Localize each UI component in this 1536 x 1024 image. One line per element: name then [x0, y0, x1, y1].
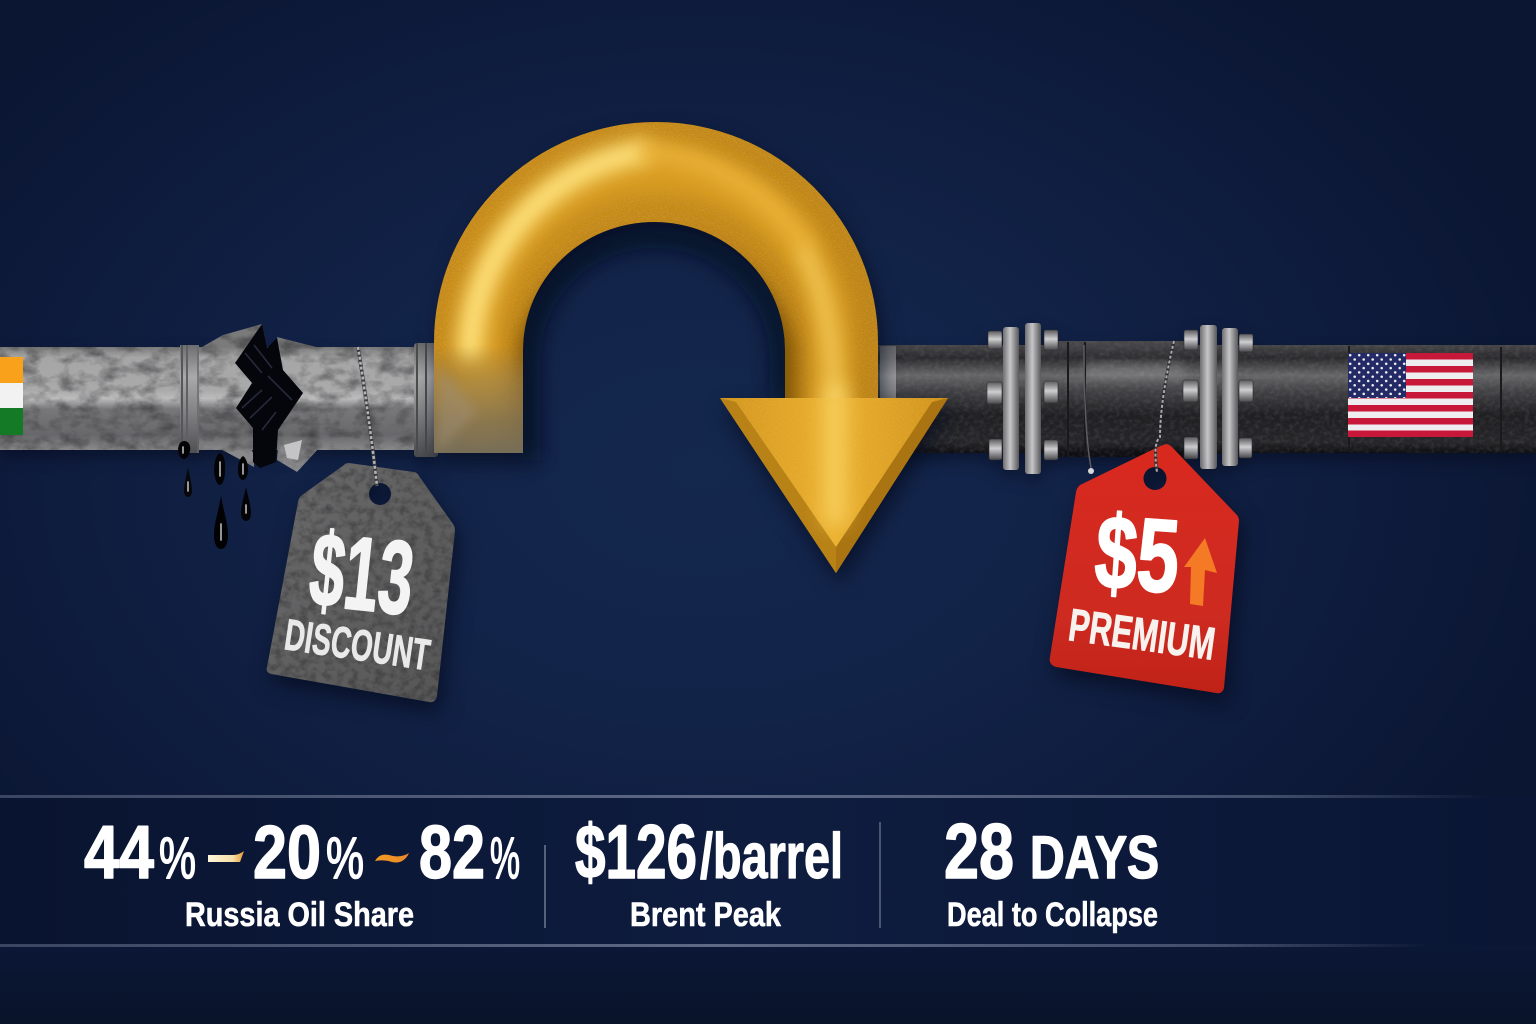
center gloss: [823, 385, 847, 525]
right highlight: [802, 248, 835, 420]
dash arrow one: [208, 851, 244, 862]
sleeve highlight: [1085, 362, 1185, 378]
rust blend where gold meets steel: [434, 350, 523, 453]
bolts: [987, 330, 1058, 460]
value: $126: [575, 810, 697, 895]
percent: %: [490, 826, 520, 891]
tube: [430, 118, 882, 458]
left bevel: [720, 398, 836, 573]
tag label: PREMIUM: [1066, 598, 1218, 670]
unit: /barrel: [700, 820, 843, 892]
torn metal flaps: [202, 324, 320, 472]
tag body: [1050, 444, 1239, 693]
caption: Russia Oil Share: [185, 896, 414, 934]
drop highlights: [183, 447, 246, 540]
orange up arrow: [1184, 538, 1217, 606]
tag label: DISCOUNT: [282, 610, 433, 680]
oil drop: [184, 467, 192, 497]
stat: Russia oil share: [84, 810, 520, 934]
dark hole: [235, 324, 303, 468]
value: 28: [944, 807, 1014, 895]
value 82: 82: [419, 810, 485, 894]
caption: Brent Peak: [630, 896, 781, 934]
flange plates: [1003, 323, 1041, 474]
bottom fade: [0, 946, 1536, 1024]
grid inside hole: [242, 345, 292, 430]
loose wire end: [1084, 345, 1094, 474]
red premium tag: [1050, 341, 1239, 693]
bolts: [1183, 330, 1253, 459]
left pipe: India side: [0, 343, 438, 457]
oil drop: [238, 456, 248, 480]
arch inner shadow: [530, 238, 780, 460]
percent: %: [159, 826, 196, 891]
oil drips: [178, 441, 251, 549]
pipe rupture: [202, 324, 320, 472]
oil drop: [178, 441, 190, 459]
inner shadow band: [530, 249, 783, 453]
divider: [879, 822, 881, 928]
head base: [720, 398, 948, 573]
stat: Brent peak: [575, 810, 843, 934]
tag body: [267, 463, 455, 702]
left highlight: [470, 152, 640, 350]
percent: %: [326, 826, 364, 891]
hanging wire: [358, 347, 377, 486]
band background: [0, 796, 1536, 946]
left collar: [180, 345, 199, 453]
stats band: [0, 795, 1536, 1024]
top highlight: [640, 152, 808, 250]
pipe body: [878, 345, 1536, 453]
oil drop: [241, 487, 251, 521]
dash arrow two: [375, 853, 409, 863]
right pipe: USA side: [878, 323, 1536, 474]
value 44: 44: [84, 810, 154, 894]
center sleeve: [1058, 341, 1190, 457]
gold U-turn arrow: [430, 118, 948, 573]
tag amount: $13: [305, 512, 419, 638]
pipe body: [0, 347, 436, 450]
weld seams: [1068, 342, 1501, 456]
flange left: [987, 323, 1058, 474]
hanging wire: [1155, 341, 1174, 472]
flange right: [1183, 325, 1253, 469]
India flag: [0, 357, 23, 435]
tube base: [430, 118, 882, 458]
divider: [544, 845, 546, 928]
oil drop: [214, 453, 225, 485]
body glow: [478, 172, 831, 453]
end collar: [880, 346, 896, 452]
arrowhead: [720, 385, 948, 573]
caption: Deal to Collapse: [947, 896, 1158, 934]
value 20: 20: [253, 810, 321, 894]
tag amount: $5: [1091, 494, 1183, 616]
right bevel: [836, 398, 948, 573]
grey discount tag: [267, 347, 455, 702]
bottom rule: [0, 944, 1430, 947]
stat: deal to collapse: [944, 807, 1159, 934]
unit: DAYS: [1030, 824, 1159, 891]
flange plates: [1200, 325, 1238, 469]
top rule: [0, 795, 1490, 798]
oil drop: [214, 495, 228, 549]
right collar: [414, 343, 438, 457]
USA flag: [1348, 353, 1473, 437]
rust streak: [436, 369, 476, 444]
